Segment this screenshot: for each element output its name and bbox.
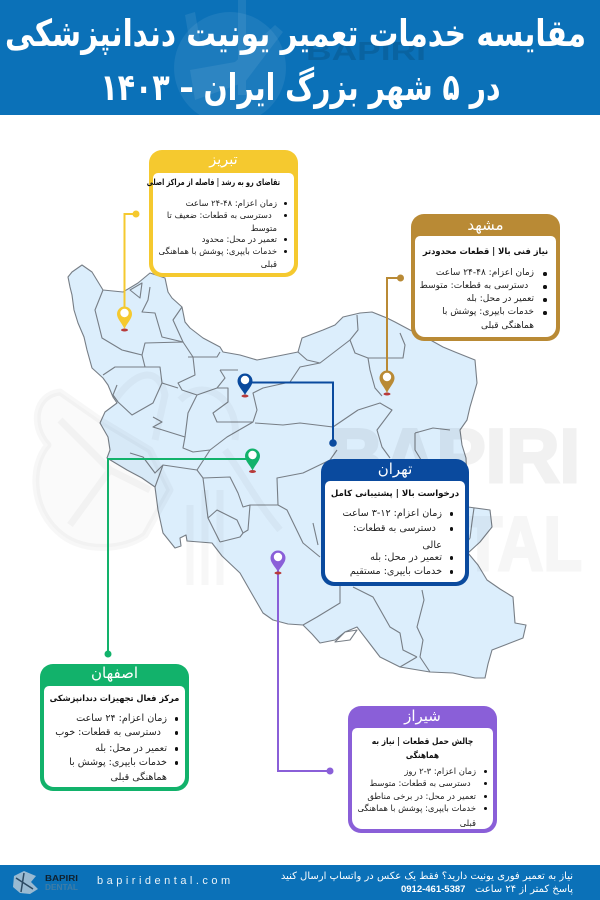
card heading <box>372 737 473 760</box>
title line 2: در ۵ شهر بزرگ ایران – ۱۴۰۳ <box>101 65 501 109</box>
connector: Mashhad <box>387 274 404 380</box>
country outline <box>68 265 526 678</box>
footer logo: BAPIRI <box>45 874 78 883</box>
city name: اصفهان <box>91 664 138 682</box>
card bullet list: خدمات بایپری: پوشش با هماهنگی <box>159 246 277 256</box>
watermark: BAPIRI: BAPIRI <box>330 414 580 499</box>
card bullet list: تعمیر در محل: محدود <box>202 234 277 244</box>
card bullet list: عالی <box>422 540 442 551</box>
pin: Mashhad <box>380 370 394 396</box>
card bullet list: قبلی <box>460 818 476 828</box>
card bullet list <box>55 713 178 783</box>
card heading: درخواست بالا | پشتیبانی کامل <box>331 489 459 499</box>
card bullet list: دسترسی به قطعات: ضعیف تا <box>167 210 272 220</box>
card bullet list: هماهنگی قبلی <box>111 772 167 783</box>
card bullet list <box>358 766 487 828</box>
card: Mashhad <box>411 214 560 341</box>
pin: Tabriz <box>117 306 132 332</box>
watermark: chair outline <box>36 375 280 585</box>
connector: Tehran <box>250 382 337 447</box>
footer logo: DENTAL <box>45 883 78 892</box>
city name: تبریز <box>209 152 238 168</box>
footer band <box>0 865 600 900</box>
card bullet list: دسترسی به قطعات: خوب <box>55 727 161 738</box>
card heading: مرکز فعال تجهیزات دندانپزشکی <box>50 694 179 704</box>
card: Shiraz <box>348 706 497 833</box>
connector: Isfahan <box>104 459 252 658</box>
card heading: هماهنگی <box>406 750 439 760</box>
card bullet list: دسترسی به قطعات: متوسط <box>420 281 528 291</box>
card bullet list: دسترسی به قطعات: <box>353 523 436 534</box>
connector: Shiraz <box>278 570 334 774</box>
card bullet list: تعمیر در محل: بله <box>370 552 442 563</box>
city name: مشهد <box>467 216 504 234</box>
card bullet list: زمان اعزام: ۴۸-۲۴ ساعت <box>436 268 534 278</box>
card heading: تقاضای رو به رشد | فاصله از مراکز اصلی <box>147 178 280 188</box>
header band <box>0 0 600 115</box>
footer line 1: نیاز به تعمیر فوری یونیت دارید؟ فقط یک عکس در واتساپ ارسال کنید <box>281 871 573 882</box>
header watermark: BAPIRI <box>306 36 426 66</box>
card bullet list: زمان اعزام: ۲۴ ساعت <box>76 713 167 724</box>
pin: Isfahan <box>245 448 260 473</box>
website: bapiridental.com <box>97 875 234 887</box>
card: Isfahan <box>40 664 189 791</box>
card bullet list: خدمات بایپری: پوشش با <box>442 307 534 317</box>
card bullet list: خدمات بایپری: پوشش با هماهنگی <box>358 803 476 813</box>
card bullet list: خدمات بایپری: پوشش با <box>69 757 167 768</box>
card bullet list: زمان اعزام: ۴۸-۲۴ ساعت <box>186 198 277 208</box>
pin: Tehran <box>238 374 252 398</box>
footer logo <box>13 871 78 894</box>
connector: Tabriz <box>124 210 140 318</box>
card bullet list: زمان اعزام: ۱۲-۳ ساعت <box>343 508 442 519</box>
card heading: چالش حمل قطعات | نیاز به <box>372 737 473 747</box>
pin: Shiraz <box>270 550 286 574</box>
footer line 2: پاسخ کمتر از ۲۴ ساعت 0912-461-5387 <box>401 884 573 895</box>
watermark: dental chair and brand <box>36 375 582 587</box>
map of Iran <box>68 265 526 678</box>
card bullet list: تعمیر در محل: بله <box>95 743 167 754</box>
card bullet list: هماهنگی قبلی <box>481 321 534 331</box>
card bullet list <box>159 198 287 269</box>
header watermark <box>174 0 426 124</box>
card: Tehran <box>321 459 469 586</box>
city name: تهران <box>378 460 412 478</box>
card bullet list: دسترسی به قطعات: متوسط <box>369 778 471 788</box>
card bullet list: متوسط <box>251 223 277 233</box>
card heading: نیاز فنی بالا | قطعات محدودتر <box>423 247 548 257</box>
card: Tabriz <box>149 150 298 277</box>
card bullet list <box>420 268 547 331</box>
card bullet list: تعمیر در محل: بله <box>467 294 534 304</box>
card bullet list: قبلی <box>261 259 277 269</box>
city name: شیراز <box>404 707 441 725</box>
provincial borders <box>95 290 142 355</box>
card bullet list: زمان اعزام: ۳-۲ روز <box>404 766 476 776</box>
card bullet list: خدمات بایپری: مستقیم <box>350 566 442 577</box>
card bullet list: تعمیر در محل: در برخی مناطق <box>367 791 476 801</box>
card bullet list <box>343 508 453 577</box>
